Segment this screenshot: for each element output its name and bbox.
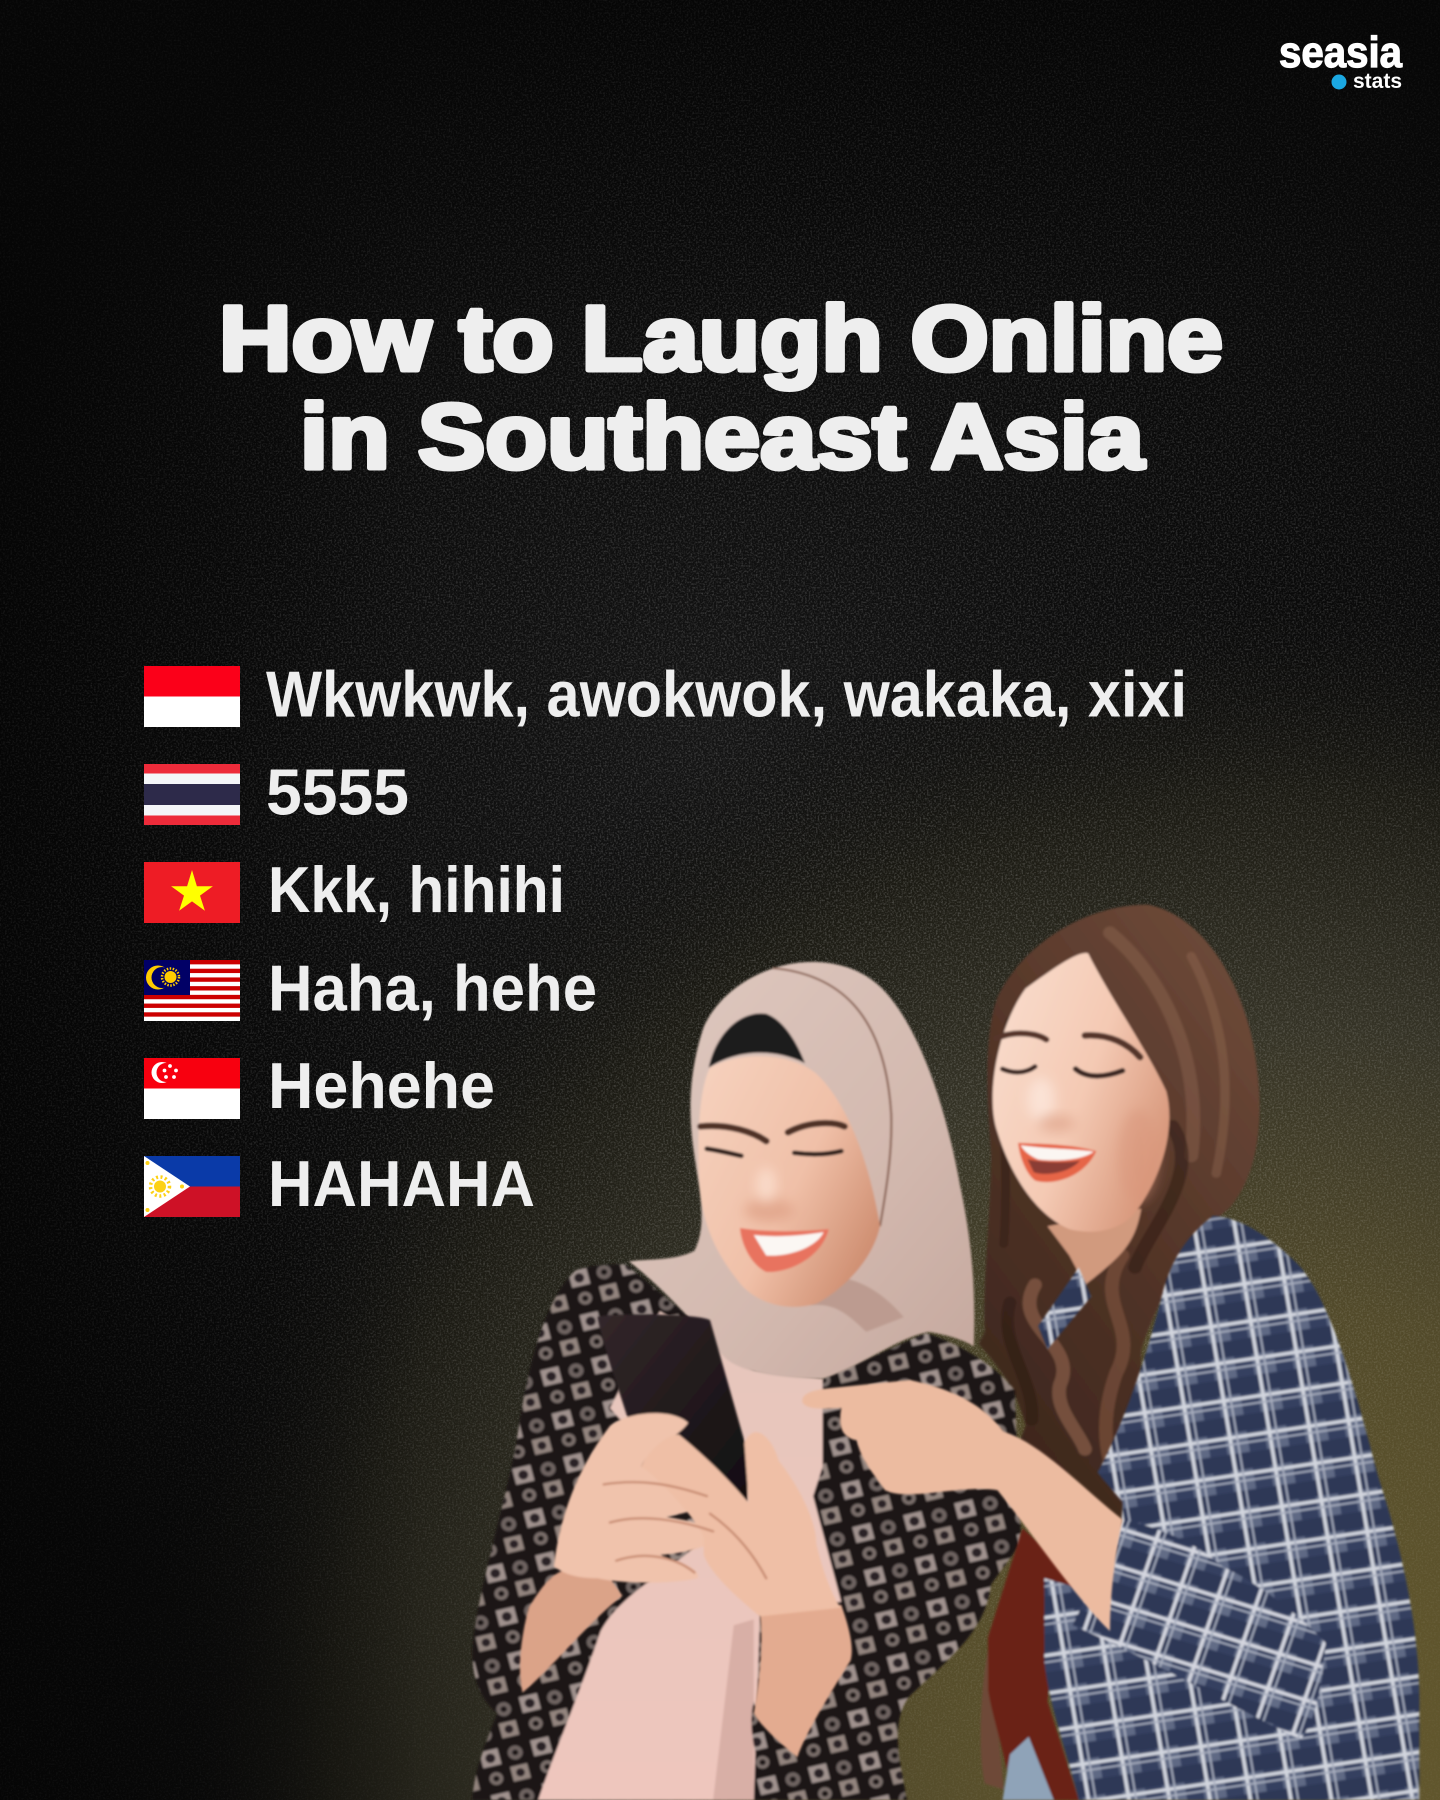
row: Malaysia: Haha, hehe [268,952,597,1024]
row: Indonesia: Wkwkwk, awokwok, wakaka, xixi [266,658,1187,730]
flag: Malaysia [144,960,240,1021]
flag: Philippines [144,1156,240,1217]
row: Singapore: Hehehe [268,1049,495,1122]
woman on the right: hair and face [979,905,1260,1531]
logo: seasia stats: seasia [1279,28,1402,77]
photo: two women laughing at a phone [472,905,1419,1800]
title: How to Laugh Online [219,288,1223,390]
woman on the left: blouse [472,1264,1021,1800]
woman on the left: hijab and face [629,962,974,1379]
woman on the right: top, jeans and shirt [981,1216,1419,1800]
row: Thailand: 5555 [266,756,409,828]
row: Philippines [144,1147,535,1220]
row: Malaysia [144,952,597,1024]
flag: Singapore [144,1058,240,1119]
flag: Indonesia [144,666,240,727]
woman on the right: pointing arm and hand [802,1380,1122,1631]
title: in Southeast Asia [300,386,1145,488]
flag: Vietnam [144,862,240,923]
row: Singapore [144,1049,495,1122]
row: Vietnam: Kkk, hihihi [268,853,565,926]
row: Vietnam [144,853,565,926]
row: Philippines: HAHAHA [268,1147,535,1220]
list of countries and laughs [144,658,1187,1220]
row: Thailand [144,756,409,828]
title [219,288,1223,488]
flag: Thailand [144,764,240,825]
logo: seasia stats: stats [1353,70,1402,93]
phone and hands [520,1314,852,1757]
